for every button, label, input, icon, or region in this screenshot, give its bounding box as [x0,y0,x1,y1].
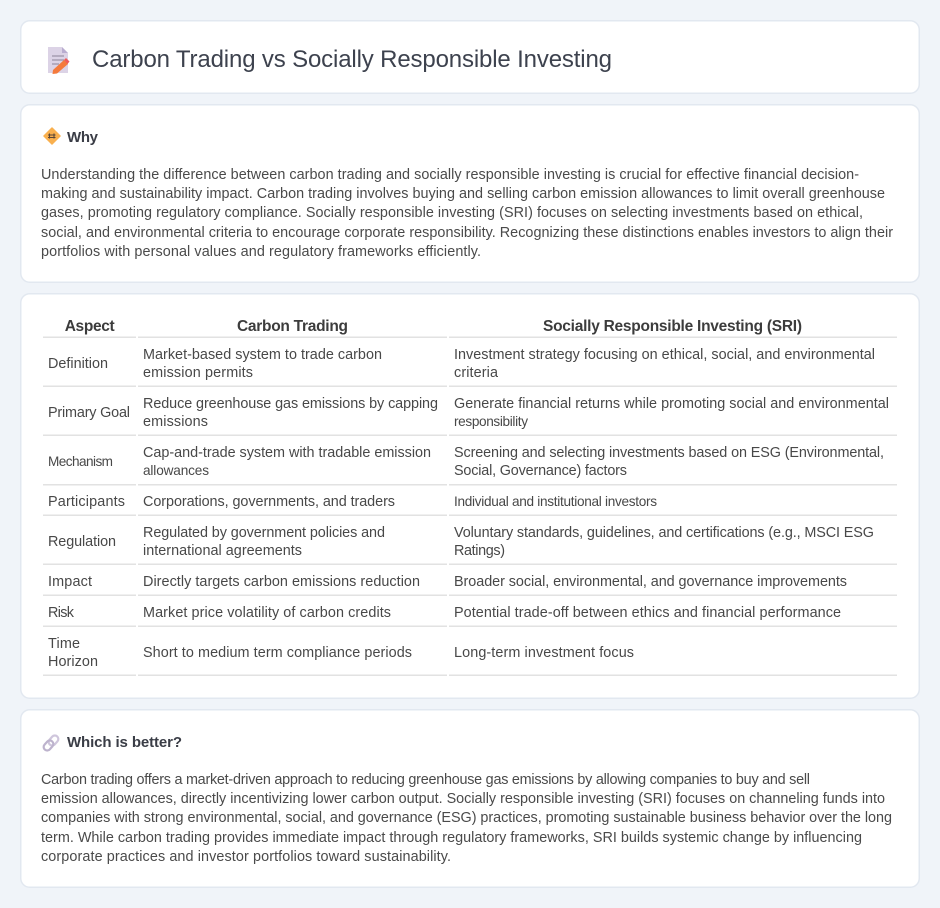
text block: why paragraph: Understanding the difference between carbon trading and socially responsible investing is crucial for effective financial decision- [41,167,859,183]
row: impact: Broader social, environmental, and governance improvements [454,574,847,590]
row: primary goal: Reduce greenhouse gas emissions by capping [143,396,438,412]
icon: orange diamond [44,128,60,144]
row: time horizon: Long-term investment focus [454,645,634,661]
row: primary goal: Generate financial returns while promoting social and environmental [454,396,889,412]
table header row: Aspect [65,318,115,335]
row: regulation: Regulation [48,534,116,550]
row: participants: Participants [48,494,125,510]
row: regulation: international agreements [143,543,302,559]
row: risk: Market price volatility of carbon credits [143,605,391,621]
row: participants: Individual and institutional investors [454,494,657,509]
row: time horizon: Short to medium term compliance periods [143,645,412,661]
row: definition [48,347,875,381]
row: impact [48,574,847,590]
row: mechanism: Social, Governance) factors [454,463,627,479]
row: mechanism: Cap-and-trade system with tradable emission [143,445,431,461]
row: time horizon [48,636,634,670]
text block: why paragraph: gases, promoting regulatory compliance. Socially responsible investing (SRI) focuses on selecting investments based on ethical, [41,205,863,221]
row: definition: Investment strategy focusing on ethical, social, and environmental [454,347,875,363]
text block: which is better paragraph: term. While carbon trading provides immediate impact through regulatory frameworks, SRI builds systemic change by influencing [41,830,862,846]
heading: which is better: Which is better? [67,734,182,751]
text block: which is better paragraph: Carbon trading offers a market-driven approach to reducing greenhouse gas emissions by allowing companies to buy and sell [41,772,810,788]
text block: why paragraph [41,167,893,260]
row: participants [48,494,657,510]
row: time horizon: Horizon [48,654,98,670]
panel: title header [21,21,919,93]
panel: which is better [21,710,919,887]
row: risk: Risk [48,605,75,621]
row: regulation: Regulated by government policies and [143,525,385,541]
table header row [65,318,802,335]
row: mechanism: allowances [143,463,209,478]
row: mechanism: Screening and selecting investments based on ESG (Environmental, [454,445,884,461]
row: time horizon: Time [48,636,80,652]
text block: which is better paragraph: corporate practices and investor portfolios toward sustainability. [41,849,451,865]
text block: which is better paragraph [41,772,892,865]
panel: comparison table [21,294,919,698]
row: mechanism [48,445,884,479]
text block: which is better paragraph: emission allowances, directly incentivizing lower carbon output. Socially responsible investing (SRI) focuses on channeling funds into [41,791,885,807]
text block: which is better paragraph: companies with strong environmental, social, and governance (ESG) practices, promoting sustainable business behavior over the long [41,810,892,826]
icon: chain link [42,734,60,752]
row: regulation: Ratings) [454,543,505,559]
table header row: Socially Responsible Investing (SRI) [543,318,802,335]
row: definition: Market-based system to trade carbon [143,347,382,363]
row: primary goal [48,396,889,430]
row: risk: Potential trade-off between ethics and financial performance [454,605,841,621]
icon: document with pencil [48,47,70,74]
row: primary goal: responsibility [454,414,528,429]
row: primary goal: Primary Goal [48,405,130,421]
row: regulation: Voluntary standards, guidelines, and certifications (e.g., MSCI ESG [454,525,874,541]
row: regulation [48,525,874,559]
row: definition: Definition [48,356,108,372]
table header row: Carbon Trading [237,318,348,335]
row: impact: Directly targets carbon emissions reduction [143,574,420,590]
row: impact: Impact [48,574,92,590]
row: mechanism: Mechanism [48,454,113,469]
panel: why [21,105,919,282]
text block: why paragraph: making and sustainability impact. Carbon trading involves buying and selling carbon emission allowances to limit overall greenhouse [41,186,885,202]
row: primary goal: emissions [143,414,208,430]
row: definition: criteria [454,365,498,381]
text block: why paragraph: social, and environmental criteria to encourage corporate responsibility. Recognizing these distinctions enables investors to align their [41,225,893,241]
heading: why: Why [67,129,99,146]
row: definition: emission permits [143,365,253,381]
row: participants: Corporations, governments, and traders [143,494,395,510]
text block: why paragraph: portfolios with personal values and regulatory frameworks efficiently. [41,244,481,260]
title: Carbon Trading vs Socially Responsible Investing [92,46,612,73]
row: risk [48,605,841,621]
